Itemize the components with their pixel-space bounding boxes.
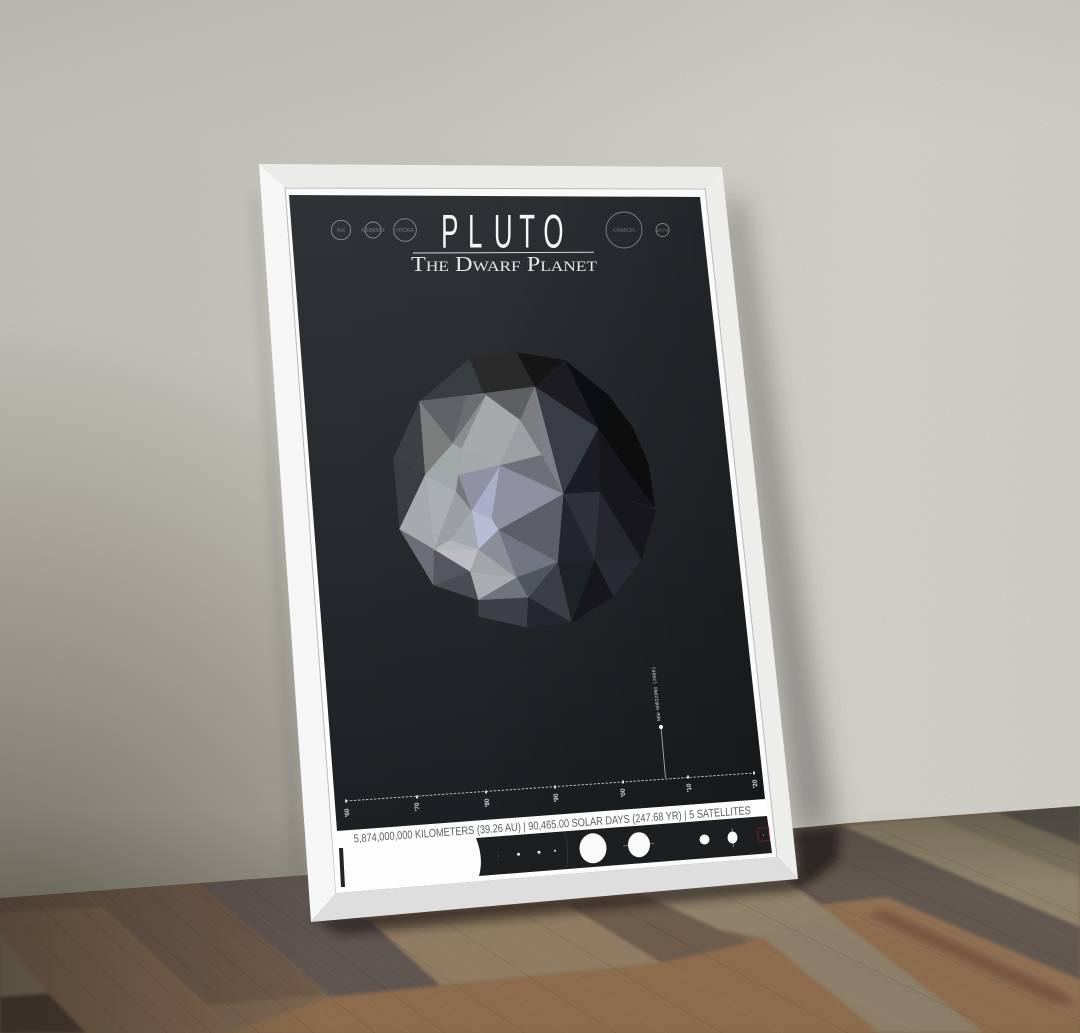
- frame: inner white mat: [285, 187, 777, 893]
- frame: left rail: [259, 164, 336, 922]
- mission marker: New Horizons: NEW HORIZONS (2006): [651, 666, 662, 721]
- moon: Styx: [656, 224, 669, 236]
- body: Charon disc: [623, 832, 654, 857]
- planet: low-poly Pluto: [393, 352, 656, 627]
- frame: right rail: [705, 167, 798, 879]
- tick label: '70: [414, 802, 421, 812]
- moons scale strip: [476, 816, 772, 876]
- moon: Hydra: HYDRA: [396, 228, 414, 234]
- moon: Hydra: [394, 219, 416, 241]
- frame: bottom rail: [311, 857, 798, 922]
- moon: Nix: NIX: [337, 228, 346, 234]
- tick label: '80: [484, 798, 491, 808]
- poster: white footer sheet: [289, 195, 772, 893]
- moon: Charon: [606, 212, 642, 248]
- stats line: 5,874,000,000 KILOMETERS (39.26 AU) | 90,465.00 SOLAR DAYS (247.68 YR) | 5 SATELLITES: [353, 805, 751, 845]
- poster: [289, 195, 772, 893]
- moon: Charon: CHARON: [613, 228, 635, 234]
- planet: lit facets: [393, 387, 563, 600]
- title: PLUTO: [441, 207, 564, 259]
- wood grain lines: [242, 830, 1080, 1033]
- timeline: [344, 772, 759, 818]
- subtitle: The Dwarf Planet: [411, 252, 597, 276]
- poster: dark panel: [289, 195, 765, 831]
- title rule: [413, 251, 594, 254]
- moon: Styx: STYX: [657, 228, 668, 233]
- black side bar: [339, 848, 345, 887]
- body: small disc: [700, 834, 710, 844]
- picture frame: [259, 164, 798, 922]
- body: small disc with axis: [728, 828, 738, 847]
- mission marker: New Horizons: [651, 666, 666, 778]
- body: Pluto disc: [580, 833, 606, 863]
- frame: top rail: [259, 164, 722, 188]
- tick label: '90: [553, 793, 560, 803]
- moon: Kerberos: [362, 222, 385, 238]
- wall background: [0, 0, 846, 898]
- tick label: '10: [686, 783, 693, 793]
- planet: dark outer facets: [393, 352, 656, 627]
- tick label: '20: [752, 779, 759, 789]
- moon: Kerberos: KERBEROS: [362, 228, 385, 234]
- red marker square: [758, 828, 769, 841]
- tick label: '00: [620, 788, 627, 798]
- tick label: '60: [344, 808, 351, 818]
- wooden floor: [0, 800, 1080, 1033]
- moon: Nix: [331, 220, 351, 240]
- tiny moons: [497, 850, 556, 857]
